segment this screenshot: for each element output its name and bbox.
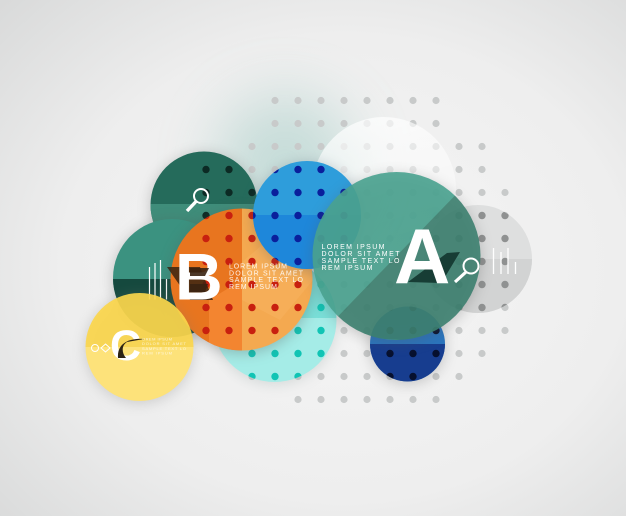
text block C: SAMPLE TEXT LO xyxy=(142,346,186,351)
text block A: DOLOR SIT AMET xyxy=(322,251,400,258)
letter B with shadow shape: B xyxy=(175,240,223,314)
circle: yellow panel C xyxy=(85,293,195,403)
text block B: LOREM IPSUM xyxy=(229,264,287,270)
circle: dark green with magnifier xyxy=(144,148,260,224)
circle: green with bars xyxy=(107,219,200,340)
text block B: SAMPLE TEXT LO xyxy=(229,277,304,284)
circle: white translucent xyxy=(312,117,456,261)
text block B xyxy=(229,264,304,291)
letter A shadow shape xyxy=(408,252,460,283)
text block A xyxy=(322,244,400,272)
letter A: A xyxy=(394,212,450,300)
circle: light teal xyxy=(214,270,340,388)
text block C: REM IPSUM xyxy=(142,350,172,356)
icon: small circle and diamond xyxy=(92,344,110,352)
circle: grey with bars xyxy=(460,205,532,313)
text block A: SAMPLE TEXT LO xyxy=(322,258,400,265)
text block C: DOLOR SIT AMET xyxy=(142,341,187,346)
text block C xyxy=(142,336,187,356)
dot grid xyxy=(248,97,508,403)
circle: orange panel B xyxy=(166,208,318,359)
letter C: C xyxy=(110,322,141,370)
text block C: OREM IPSUM xyxy=(142,336,172,342)
circle: big teal panel A xyxy=(312,172,482,345)
text block B: DOLOR SIT AMET xyxy=(229,270,304,278)
circle: navy xyxy=(364,306,450,389)
text block A: REM IPSUM xyxy=(322,265,373,272)
text block B: REM IPSUM xyxy=(229,284,277,291)
teal glow xyxy=(215,95,355,235)
icon: magnifier xyxy=(187,189,208,211)
letter C shadow swoosh xyxy=(118,339,144,358)
circle: blue xyxy=(246,158,361,278)
icon: magnifier xyxy=(455,258,478,282)
text block A: LOREM IPSUM xyxy=(322,244,385,251)
